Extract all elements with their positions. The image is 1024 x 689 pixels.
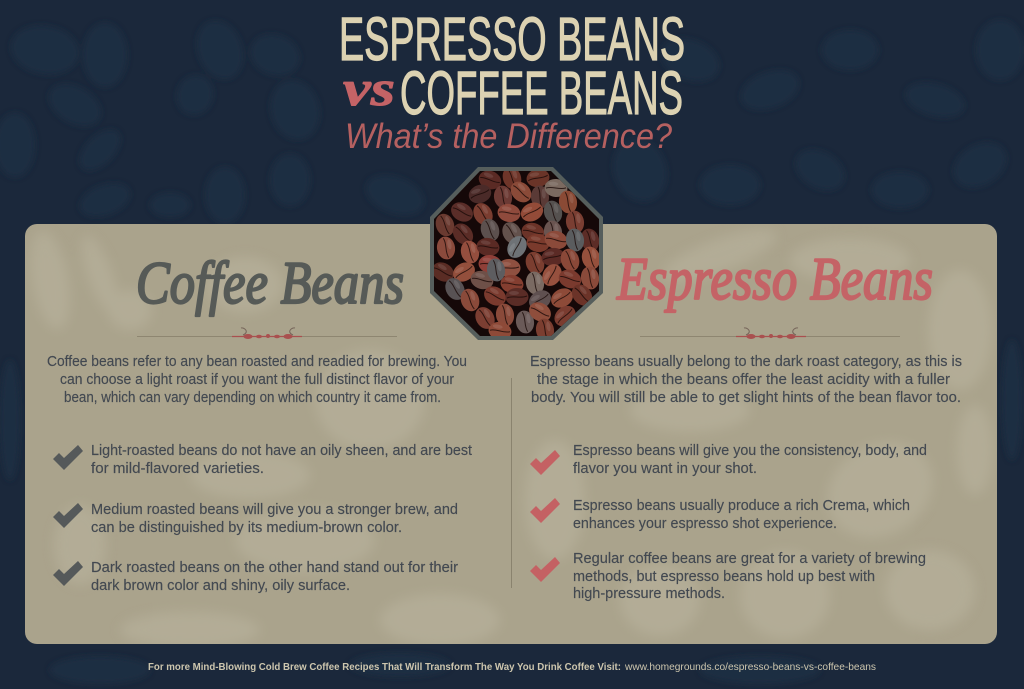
icon: check bbox=[530, 498, 560, 523]
bullet text: for mild-flavored varieties. bbox=[91, 461, 264, 477]
title bbox=[339, 5, 685, 156]
text block: espresso beans intro: Espresso beans usually belong to the dark roast category, as this is bbox=[530, 354, 962, 370]
text block: coffee beans intro: bean, which can vary depending on which country it came from. bbox=[64, 390, 441, 406]
footer url: www.homegrounds.co/espresso-beans-vs-coffee-beans bbox=[624, 661, 876, 673]
list: coffee beans points bbox=[53, 443, 472, 594]
bullet text: Espresso beans usually produce a rich Crema, which bbox=[573, 498, 910, 514]
heading: Espresso Beans: Espresso Beans bbox=[616, 246, 933, 312]
text block: espresso beans intro bbox=[530, 354, 962, 406]
list: espresso beans points bbox=[530, 443, 927, 602]
bullet text bbox=[91, 560, 458, 594]
text block: espresso beans intro: body. You will still be able to get slight hints of the bean flavor too. bbox=[531, 390, 961, 406]
heading: Coffee Beans: Coffee Beans bbox=[136, 250, 404, 316]
bullet text bbox=[91, 502, 458, 536]
icon: check bbox=[53, 503, 83, 528]
bullet text: Medium roasted beans will give you a stronger brew, and bbox=[91, 502, 458, 518]
bullet text: Dark roasted beans on the other hand stand out for their bbox=[91, 560, 458, 576]
text block: coffee beans intro: can choose a light roast if you want the full distinct flavor of your bbox=[60, 372, 454, 388]
bullet text: enhances your espresso shot experience. bbox=[573, 516, 837, 532]
bullet text bbox=[573, 443, 927, 477]
subtitle: What’s the Difference? bbox=[345, 117, 672, 156]
bullet text: Light-roasted beans do not have an oily sheen, and are best bbox=[91, 443, 472, 459]
title line: Espresso Beans: ESPRESSO BEANS bbox=[339, 5, 685, 73]
text block: coffee beans intro: Coffee beans refer to any bean roasted and readied for brewing. You bbox=[47, 354, 467, 370]
icon: check bbox=[530, 450, 560, 475]
icon: check bbox=[53, 445, 83, 470]
bullet text: dark brown color and shiny, oily surface. bbox=[91, 578, 350, 594]
footer call to action: For more Mind-Blowing Cold Brew Coffee Recipes That Will Transform The Way You Drink Coffee Visit: bbox=[148, 661, 621, 673]
ornament: left divider bbox=[137, 328, 397, 339]
icon: check bbox=[530, 557, 560, 582]
bullet text bbox=[573, 498, 910, 532]
bullet text: Regular coffee beans are great for a variety of brewing bbox=[573, 551, 926, 567]
footer bbox=[148, 661, 876, 673]
bullet text: can be distinguished by its medium-brown color. bbox=[91, 520, 402, 536]
bullet text bbox=[91, 443, 472, 477]
bullet text: flavor you want in your shot. bbox=[573, 461, 757, 477]
ornament: right divider bbox=[640, 328, 900, 339]
text block: espresso beans intro: the stage in which the beans offer the least acidity with a fuller bbox=[537, 372, 950, 388]
bullet text: high-pressure methods. bbox=[573, 586, 725, 602]
panel: comparison card bbox=[24, 219, 997, 648]
bullet text: Espresso beans will give you the consistency, body, and bbox=[573, 443, 927, 459]
octagon photo: coffee beans bbox=[429, 164, 603, 343]
title word: vs: vs bbox=[343, 60, 395, 116]
title line: Coffee Beans: COFFEE BEANS bbox=[400, 59, 683, 127]
panel background beans bbox=[24, 219, 993, 648]
bullet text: methods, but espresso beans hold up best with bbox=[573, 569, 875, 585]
text block: coffee beans intro bbox=[47, 354, 467, 406]
bullet text bbox=[573, 551, 926, 602]
icon: check bbox=[53, 561, 83, 586]
